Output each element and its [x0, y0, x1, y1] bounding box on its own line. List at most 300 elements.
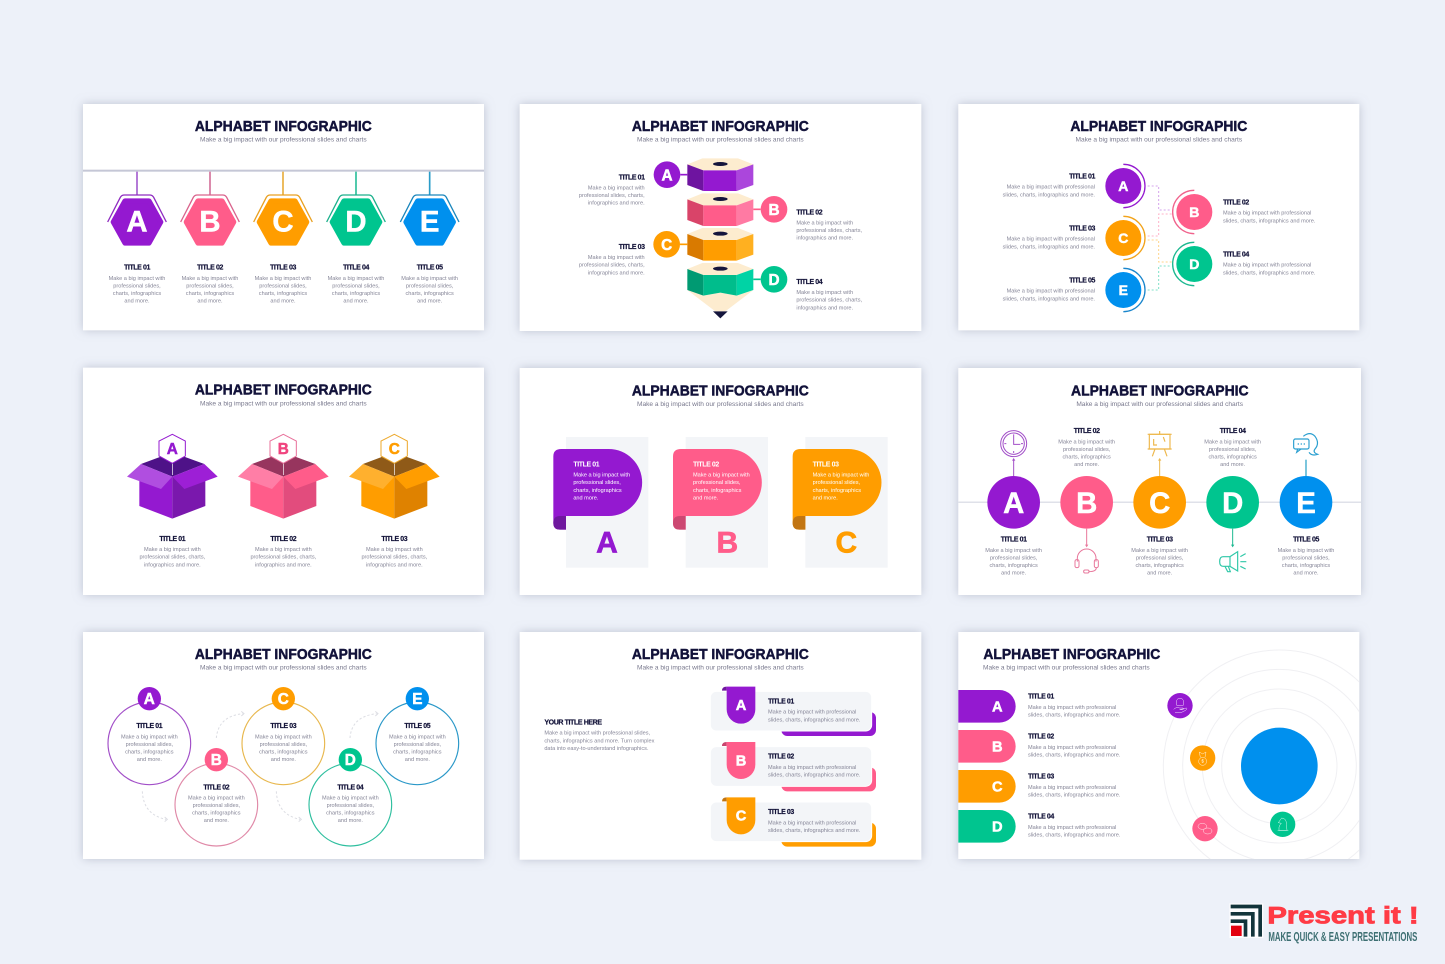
node E: E: [1119, 282, 1128, 298]
card B: charts, infographics: [693, 488, 742, 494]
text: title 04: and more.: [343, 299, 369, 305]
text: title 02: infographics and more.: [255, 562, 312, 568]
text: title 03: charts, infographics: [259, 291, 307, 297]
text: title 02: Make a big impact with: [182, 276, 238, 282]
text: title 03: Make a big impact with professional: [1007, 237, 1095, 243]
badge A: [654, 161, 687, 188]
step B: and more.: [204, 818, 229, 824]
text: title 03: [1028, 774, 1121, 798]
card C: C: [836, 527, 857, 560]
step D: professional slides,: [327, 803, 374, 809]
step E: [376, 687, 459, 785]
step B: professional slides,: [193, 803, 240, 809]
node E: [1105, 268, 1145, 312]
text: title 01: slides, charts, infographics and more.: [1028, 712, 1121, 718]
step E: Make a big impact with: [389, 734, 446, 740]
step B: [175, 748, 258, 846]
text: title 04: [1028, 814, 1121, 838]
text: title 01: and more.: [124, 299, 150, 305]
text: title 01: slides, charts, infographics and more.: [1003, 192, 1095, 198]
panel: ribbon cards slide: [520, 368, 921, 595]
step B: B: [211, 752, 222, 769]
node B: [1060, 476, 1113, 547]
node D: [1173, 242, 1212, 286]
text: title 04: Make a big impact with professional: [1028, 825, 1116, 831]
hexagon D: D: [345, 206, 367, 239]
tab D: D: [992, 819, 1003, 835]
hexagon E: E: [420, 206, 439, 239]
icon: clock: [1001, 431, 1027, 457]
title: ALPHABET INFOGRAPHIC: [195, 118, 372, 135]
node C: C: [1149, 487, 1170, 520]
panel: circles tree slide: [958, 104, 1359, 330]
card A: [553, 437, 648, 568]
card B: [673, 437, 768, 568]
tab B: [958, 730, 1016, 763]
hanging rail: [83, 170, 484, 172]
text: title 05: TITLE 05: [417, 264, 443, 271]
row C: C: [736, 809, 747, 825]
row B: TITLE 02: [768, 754, 794, 761]
text: title 02: Make a big impact with: [796, 220, 853, 226]
node B: [1173, 190, 1212, 234]
row C: Make a big impact with professional: [768, 820, 856, 826]
text: title 01: infographics and more.: [588, 201, 645, 207]
icon: presentation board: [1148, 431, 1172, 456]
text: title 05: professional slides,: [406, 284, 454, 290]
step B: charts, infographics: [192, 810, 241, 816]
text: title 02: [182, 264, 238, 305]
tab D: [958, 810, 1016, 843]
step B: Make a big impact with: [188, 795, 245, 801]
text: title 02: TITLE 02: [1074, 428, 1100, 435]
text: title 03: [1131, 537, 1188, 577]
text: title 02: charts, infographics: [1062, 454, 1111, 460]
title: ALPHABET INFOGRAPHIC: [1070, 118, 1247, 135]
subtitle: Make a big impact with our professional slides and charts: [1075, 137, 1243, 144]
step C: and more.: [271, 757, 296, 763]
title: ALPHABET INFOGRAPHIC: [632, 118, 809, 135]
text: title 01: professional slides, charts,: [579, 193, 645, 199]
card B: TITLE 02: [693, 461, 719, 468]
text: title 02: Make a big impact with: [255, 547, 312, 553]
card B: B: [717, 527, 738, 560]
text: title 03: TITLE 03: [619, 244, 645, 251]
row A: A: [736, 698, 747, 714]
subtitle: Make a big impact with our professional slides and charts: [637, 401, 804, 408]
text: title 01: [985, 537, 1042, 577]
step D: [309, 748, 392, 846]
text: title 05: TITLE 05: [1293, 537, 1319, 544]
arrow: D to E: [350, 711, 378, 738]
central circle: [1241, 728, 1318, 804]
text: title 02: TITLE 02: [270, 536, 297, 543]
panel: bookmark list slide: [520, 632, 921, 860]
text: title 05: and more.: [417, 299, 443, 305]
box C: C: [389, 441, 400, 458]
step C: [242, 687, 325, 785]
text: title 05: [1003, 278, 1095, 302]
text: title 03: TITLE 03: [1147, 537, 1173, 544]
text: title 04: charts, infographics: [1208, 454, 1257, 460]
text: title 02: slides, charts, infographics and more.: [1223, 218, 1316, 224]
row A: slides, charts, infographics and more.: [768, 717, 861, 723]
text: title 02: Make a big impact with professional: [1028, 745, 1116, 751]
text: title 03: TITLE 03: [1028, 774, 1054, 781]
text: title 05: slides, charts, infographics and more.: [1003, 296, 1095, 302]
row C: [710, 797, 876, 847]
text: title 03: professional slides, charts,: [579, 263, 645, 269]
text: title 03: TITLE 03: [270, 264, 296, 271]
text: title 02: and more.: [197, 299, 223, 305]
text: title 04: TITLE 04: [1223, 252, 1249, 259]
text: title 03: [361, 536, 428, 568]
pencil segment A: [687, 158, 753, 191]
title: ALPHABET INFOGRAPHIC: [632, 382, 809, 399]
text: title 01: TITLE 01: [124, 264, 150, 271]
badge C: [653, 231, 687, 258]
badge B: [753, 196, 787, 223]
text: title 02: professional slides,: [1063, 447, 1111, 453]
node E: E: [1296, 487, 1316, 520]
text: title 04: TITLE 04: [1028, 814, 1054, 821]
text: title 01: Make a big impact with: [109, 276, 165, 282]
intro text: data into easy-to-understand infographics.: [544, 746, 649, 752]
text: title 02: Make a big impact with: [1058, 439, 1115, 445]
text: title 01: [579, 174, 645, 207]
step A: Make a big impact with: [121, 734, 178, 740]
card C: TITLE 03: [813, 461, 839, 468]
badge B: B: [768, 202, 780, 219]
node D: D: [1222, 487, 1243, 520]
card B: and more.: [693, 495, 719, 501]
pencil tip: [687, 290, 753, 318]
title: ALPHABET INFOGRAPHIC: [195, 646, 372, 663]
text: title 01: and more.: [1001, 571, 1027, 577]
text: title 03: [255, 264, 311, 305]
text: title 04: [1223, 252, 1316, 276]
step C: Make a big impact with: [255, 734, 312, 740]
pencil segment C: [687, 228, 753, 261]
icon: pink chat bubbles: [1192, 816, 1218, 841]
text: title 03: [579, 244, 645, 276]
card A: professional slides,: [573, 480, 621, 486]
text: title 01: Make a big impact with: [588, 185, 645, 191]
text: title 02: charts, infographics: [186, 291, 234, 297]
subtitle: Make a big impact with our professional slides and charts: [637, 665, 804, 672]
text: title 01: [109, 264, 165, 305]
text: title 01: professional slides,: [113, 284, 161, 290]
tab A: A: [992, 699, 1003, 715]
text: title 04: TITLE 04: [796, 279, 823, 286]
subtitle: Make a big impact with our professional slides and charts: [1076, 401, 1244, 408]
card C: [793, 437, 888, 568]
row A: [710, 687, 876, 736]
row C: TITLE 03: [768, 809, 794, 816]
text: title 04: [1204, 428, 1261, 468]
text: title 04: Make a big impact with: [796, 290, 853, 296]
box A: A: [167, 441, 178, 458]
text: title 04: Make a big impact with: [328, 276, 384, 282]
subtitle: Make a big impact with our professional slides and charts: [200, 137, 367, 144]
arrow: B to C: [216, 711, 244, 738]
tab C: [958, 770, 1016, 803]
card C: charts, infographics: [813, 488, 861, 494]
text: title 01: professional slides, charts,: [139, 555, 206, 561]
text: title 04: [796, 279, 863, 311]
text: title 02: [250, 536, 317, 568]
panel: timeline slide: [958, 368, 1361, 595]
wordmark: Present it !: [1267, 902, 1419, 929]
title: ALPHABET INFOGRAPHIC: [195, 382, 372, 399]
text: title 04: Make a big impact with: [1204, 439, 1261, 445]
card B: Make a big impact with: [693, 473, 750, 479]
step D: and more.: [338, 818, 363, 824]
badge C: C: [661, 237, 672, 254]
step E: charts, infographics: [393, 749, 442, 755]
text: title 03: TITLE 03: [381, 536, 408, 543]
text: title 03: professional slides,: [259, 284, 307, 290]
text: title 02: and more.: [1074, 462, 1100, 468]
text: title 02: infographics and more.: [796, 236, 854, 242]
step D: charts, infographics: [326, 810, 375, 816]
node A: A: [1003, 487, 1024, 520]
intro text: charts, infographics and more. Turn complex: [544, 738, 655, 744]
panel: orbit slide: [954, 628, 1364, 864]
text: title 05: Make a big impact with professional: [1007, 289, 1095, 295]
text: title 01: TITLE 01: [159, 536, 186, 543]
row B: Make a big impact with professional: [768, 765, 856, 771]
arrow: C to D: [276, 791, 301, 822]
row C: slides, charts, infographics and more.: [768, 828, 861, 834]
text: title 01: Make a big impact with professional: [1007, 185, 1095, 191]
text: title 01: [1003, 174, 1095, 198]
step A: professional slides,: [126, 742, 173, 748]
text: title 01: TITLE 01: [1028, 694, 1054, 701]
panel: ring flow slide: [83, 632, 484, 859]
panel: open boxes slide: [83, 368, 484, 595]
card A: and more.: [573, 495, 599, 501]
text: title 02: slides, charts, infographics and more.: [1028, 752, 1121, 758]
title: ALPHABET INFOGRAPHIC: [983, 646, 1160, 663]
text: title 01: Make a big impact with professional: [1028, 705, 1116, 711]
text: title 02: professional slides, charts,: [796, 228, 863, 234]
card C: Make a big impact with: [813, 473, 869, 479]
text: title 05: [1278, 537, 1334, 577]
text: title 02: professional slides, charts,: [250, 555, 317, 561]
text: title 05: Make a big impact with: [1278, 548, 1334, 554]
text: title 01: infographics and more.: [144, 562, 201, 568]
icon: green chess knight: [1270, 812, 1295, 837]
step C: TITLE 03: [270, 723, 297, 730]
subtitle: Make a big impact with our professional slides and charts: [200, 665, 367, 672]
text: title 04: slides, charts, infographics and more.: [1028, 832, 1121, 838]
card C: and more.: [813, 495, 838, 501]
icon: orange money bag: $: [1201, 759, 1204, 764]
text: title 04: and more.: [1220, 462, 1246, 468]
text: title 02: [1058, 428, 1115, 468]
hexagon B: [181, 172, 239, 243]
text: title 03: infographics and more.: [588, 270, 645, 276]
text: title 05: TITLE 05: [1069, 278, 1095, 285]
subtitle: Make a big impact with our professional slides and charts: [637, 137, 804, 144]
hexagon E: [400, 172, 459, 243]
text: title 03: and more.: [1147, 571, 1173, 577]
text: title 04: professional slides,: [332, 284, 380, 290]
title: ALPHABET INFOGRAPHIC: [1071, 382, 1249, 399]
text: title 05: [401, 264, 458, 305]
node E: [1280, 460, 1332, 529]
arrow: A to B: [142, 791, 167, 822]
node B: B: [1076, 487, 1097, 520]
text: title 02: [1028, 734, 1121, 758]
badge D: D: [768, 272, 780, 289]
timeline axis: [958, 501, 1361, 504]
card B: professional slides,: [693, 480, 741, 486]
text: title 01: TITLE 01: [619, 174, 645, 181]
step D: D: [345, 752, 356, 769]
text: title 04: TITLE 04: [343, 264, 369, 271]
text: title 03: Make a big impact with: [255, 276, 311, 282]
text: title 03: Make a big impact with: [366, 547, 423, 553]
card C: professional slides,: [813, 480, 861, 486]
step E: TITLE 05: [404, 723, 431, 730]
hexagon C: [254, 172, 312, 243]
row B: slides, charts, infographics and more.: [768, 773, 861, 779]
step C: professional slides,: [260, 742, 307, 748]
node D: [1206, 476, 1259, 547]
step E: and more.: [405, 757, 430, 763]
node C: [1133, 458, 1186, 529]
icon: megaphone: [1220, 552, 1246, 572]
text: title 04: TITLE 04: [1220, 428, 1246, 435]
text: title 03: professional slides,: [1136, 556, 1184, 562]
text: title 02: TITLE 02: [197, 264, 223, 271]
title: ALPHABET INFOGRAPHIC: [632, 646, 809, 663]
step A: A: [144, 691, 155, 708]
box B: [238, 434, 329, 519]
subtitle: Make a big impact with our professional slides and charts: [983, 665, 1150, 672]
hexagon A: A: [126, 206, 148, 239]
tab A: [958, 690, 1016, 723]
text: title 05: Make a big impact with: [401, 276, 458, 282]
badge D: [753, 266, 787, 293]
hexagon D: [327, 172, 385, 243]
step E: E: [412, 691, 422, 708]
text: title 04: Make a big impact with professional: [1223, 263, 1311, 269]
text: title 03: infographics and more.: [366, 562, 423, 568]
text: title 02: professional slides,: [186, 284, 234, 290]
pencil segment D: [687, 263, 753, 296]
row A: TITLE 01: [768, 698, 794, 705]
step A: and more.: [137, 757, 162, 763]
text: title 05: charts, infographics: [1282, 563, 1330, 569]
step C: charts, infographics: [259, 749, 308, 755]
pencil segment B: [687, 193, 753, 226]
box A: [127, 434, 218, 519]
text: title 01: charts, infographics: [989, 563, 1038, 569]
card A: Make a big impact with: [573, 473, 630, 479]
intro text: YOUR TITLE HERE: [544, 720, 602, 727]
text: title 01: Make a big impact with: [144, 547, 201, 553]
text: title 01: TITLE 01: [1001, 537, 1027, 544]
icon: chat and ear: [1294, 434, 1318, 455]
text: title 01: professional slides,: [990, 556, 1038, 562]
icon: orange money bag: [1190, 745, 1215, 771]
badge A: A: [661, 167, 673, 184]
text: title 01: Make a big impact with: [985, 548, 1042, 554]
orbit rings: [1163, 650, 1359, 859]
step A: [108, 687, 191, 785]
text: title 03: slides, charts, infographics and more.: [1003, 244, 1095, 250]
row B: B: [736, 753, 746, 769]
text: title 02: [796, 209, 863, 242]
text: title 03: [1003, 226, 1095, 250]
tab B: B: [992, 739, 1003, 755]
text: title 02: TITLE 02: [1028, 734, 1054, 741]
row A: Make a big impact with professional: [768, 710, 856, 716]
hexagon C: C: [272, 206, 294, 239]
node C: [1105, 216, 1145, 260]
step D: Make a big impact with: [322, 795, 379, 801]
step A: charts, infographics: [125, 749, 174, 755]
text: title 03: Make a big impact with professional: [1028, 785, 1116, 791]
subtitle: Make a big impact with our professional slides and charts: [200, 400, 367, 407]
node A: [987, 458, 1040, 529]
text: title 02: [1223, 200, 1316, 224]
panel: pencil slide: [520, 104, 921, 331]
hexagon B: B: [199, 206, 221, 239]
hexagon A: [108, 172, 166, 243]
text: title 05: and more.: [1293, 571, 1319, 577]
text: title 05: professional slides,: [1282, 556, 1330, 562]
text: title 04: slides, charts, infographics and more.: [1223, 270, 1316, 276]
text: title 01: TITLE 01: [1069, 174, 1095, 181]
node C: C: [1118, 230, 1128, 246]
text: title 04: professional slides, charts,: [796, 298, 863, 304]
text: title 01: [139, 536, 206, 568]
text: title 01: charts, infographics: [113, 291, 161, 297]
node A: A: [1118, 178, 1128, 194]
icon: headset: [1075, 549, 1098, 573]
text: title 03: professional slides, charts,: [361, 555, 428, 561]
text: title 03: charts, infographics: [1135, 563, 1184, 569]
text: title 03: Make a big impact with: [588, 255, 645, 261]
row B: [710, 742, 876, 791]
icon: logo mark: [1229, 903, 1263, 938]
logo: Present it: [1229, 902, 1419, 944]
node B: B: [1189, 204, 1199, 220]
tab C: C: [992, 779, 1003, 795]
card A: charts, infographics: [573, 488, 622, 494]
dotted connectors: [1148, 186, 1172, 290]
box B: B: [278, 441, 289, 458]
text: title 03: Make a big impact with: [1131, 548, 1188, 554]
text: title 05: charts, infographics: [405, 291, 454, 297]
text: title 02: TITLE 02: [796, 209, 823, 216]
card A: TITLE 01: [573, 461, 600, 468]
box C: [349, 434, 440, 519]
text: title 01: [1028, 694, 1121, 718]
card A: A: [596, 527, 618, 560]
node A: [1105, 164, 1145, 208]
text: title 04: charts, infographics: [332, 291, 380, 297]
panel: hexagon slide: [83, 104, 484, 330]
icon: purple hand and bag: [1167, 693, 1193, 718]
step B: TITLE 02: [203, 784, 230, 791]
text: title 03: slides, charts, infographics and more.: [1028, 792, 1121, 798]
node D: D: [1189, 256, 1199, 272]
